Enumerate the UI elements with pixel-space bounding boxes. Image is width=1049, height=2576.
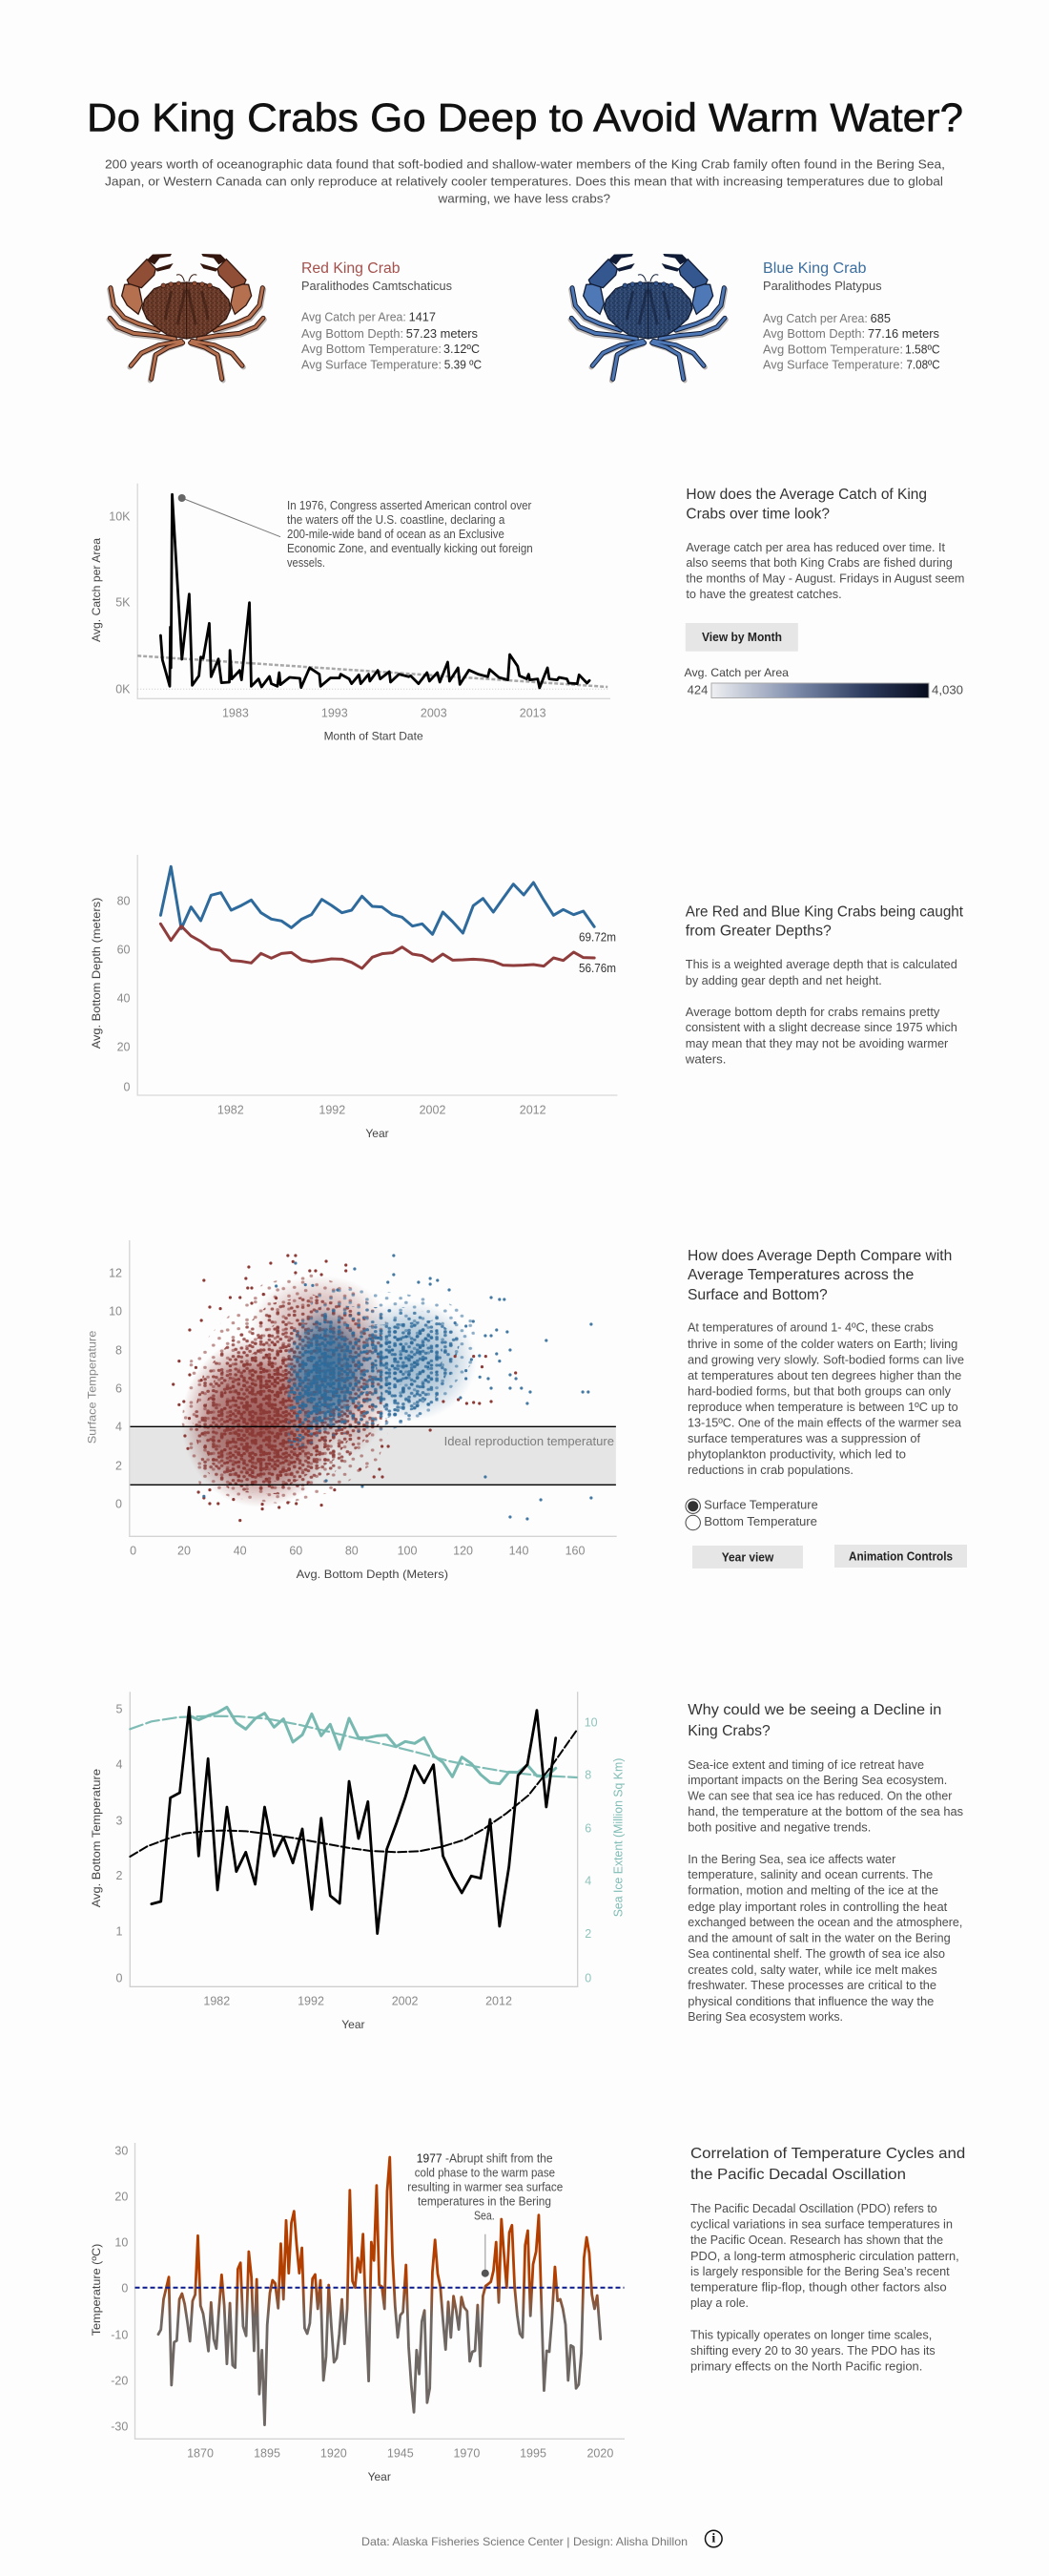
button: view by month: View by Month: [702, 631, 782, 644]
body text: We can see that sea ice has reduced. On the other: [688, 1790, 952, 1803]
body text: to have the greatest catches.: [686, 588, 842, 601]
x axis ticks: [130, 1544, 585, 1557]
footer credit: Data: Alaska Fisheries Science Center | Design: Alisha Dhillon: [361, 2535, 688, 2548]
red crab depth: 57.23 meters: [406, 327, 478, 341]
y axis ticks: -30: [111, 2420, 128, 2434]
heading: [686, 487, 927, 523]
x axis ticks: [203, 1994, 512, 2007]
catch line chart: [137, 494, 607, 689]
y axis ticks: 80: [117, 895, 131, 908]
body text: surface temperatures was a suppression of: [688, 1432, 921, 1445]
body text: This typically operates on longer time scales,: [690, 2329, 932, 2342]
body text: exchanged between the ocean and the atmosphere,: [688, 1916, 962, 1929]
body text: creates cold, salty water, while ice melt makes: [688, 1963, 937, 1977]
body text: at temperatures about ten degrees higher than the: [688, 1369, 961, 1382]
y axis ticks: [117, 895, 131, 1093]
y axis ticks: [109, 1266, 122, 1510]
y axis title: Avg. Bottom Depth (meters): [90, 898, 103, 1049]
x axis ticks: 2002: [420, 1104, 445, 1117]
body text: primary effects on the North Pacific region.: [690, 2360, 922, 2374]
band label: Ideal reproduction temperature: [444, 1435, 614, 1448]
left axis ticks: 3: [116, 1814, 123, 1827]
blue crab surface temperature: Avg Surface Temperature:: [763, 359, 903, 372]
body text: The Pacific Decadal Oscillation (PDO) refers to: [690, 2202, 937, 2215]
heading: [690, 2146, 965, 2183]
y axis ticks: -20: [111, 2375, 128, 2388]
red crab name: Red King Crab: [301, 260, 401, 277]
x axis ticks: 80: [345, 1544, 359, 1557]
heading: [686, 904, 964, 939]
radio: bottom temperature: Bottom Temperature: [704, 1515, 817, 1528]
red crab depth line: [160, 924, 594, 968]
body text: formation, motion and melting of the ice at the: [688, 1884, 938, 1898]
body text: Bering Sea ecosystem works.: [688, 2010, 843, 2024]
y axis ticks: 20: [114, 2190, 128, 2203]
body text: temperature flip-flop, though other factors also: [690, 2281, 947, 2295]
panel: blue king crab stats: [763, 260, 940, 372]
x axis ticks: [222, 707, 546, 720]
x axis ticks: 2003: [421, 707, 447, 720]
y axis title: Surface Temperature: [85, 1330, 98, 1444]
x axis ticks: 1895: [254, 2447, 280, 2461]
x axis ticks: 2012: [520, 1104, 546, 1117]
lines: [130, 1707, 577, 1934]
intro text: [105, 158, 945, 206]
left axis ticks: 2: [116, 1869, 123, 1882]
icon: info: [706, 2530, 722, 2547]
body text: important impacts on the Bering Sea ecosystem.: [688, 1774, 947, 1787]
x axis title: Month of Start Date: [324, 730, 423, 743]
right axis ticks: 4: [585, 1874, 591, 1887]
radio: surface temperature: Surface Temperature: [704, 1499, 818, 1512]
y axis ticks: 40: [117, 992, 131, 1006]
y axis title: Temperature (ºC): [90, 2244, 103, 2336]
end labels: [579, 930, 616, 975]
bottom temperature line: [152, 1707, 556, 1934]
blue outliers: [204, 1256, 591, 1519]
y axis ticks: 30: [114, 2144, 128, 2157]
heading: Surface and Bottom?: [688, 1287, 828, 1303]
blue crab species: Paralithodes Platypus: [763, 280, 882, 293]
scatter points: [174, 1256, 591, 1521]
x axis ticks: 1982: [203, 1994, 230, 2007]
body text: 13-15ºC. One of the main effects of the warmer sea: [688, 1417, 961, 1430]
x axis ticks: 2013: [520, 707, 546, 720]
sea ice line: [189, 1707, 556, 1784]
annotation text: 1977 -Abrupt shift from the: [417, 2151, 553, 2165]
x axis ticks: 2012: [485, 1994, 512, 2007]
intro text: warming, we have less crabs?: [437, 193, 610, 206]
y axis ticks: -10: [111, 2328, 128, 2341]
y axis ticks: 10K: [109, 510, 131, 524]
x axis title: Year: [368, 2470, 391, 2483]
body text: also seems that both King Crabs are fished during: [686, 556, 953, 570]
right axis ticks: 6: [585, 1821, 591, 1835]
heading: Crabs over time look?: [686, 506, 830, 523]
body text: waters.: [685, 1052, 727, 1066]
y axis ticks: 0K: [115, 682, 131, 696]
body text: hand, the temperature at the bottom of the sea has: [688, 1805, 963, 1818]
color legend: 424: [688, 684, 708, 697]
x axis ticks: 1920: [320, 2447, 347, 2461]
PDO line: [158, 2157, 601, 2425]
body text: phytoplankton productivity, which led to: [688, 1448, 906, 1462]
x axis ticks: 2002: [392, 1994, 419, 2007]
end labels: 56.76m: [579, 962, 616, 975]
panel: sea ice commentary: [688, 1702, 963, 2024]
x axis ticks: 1983: [222, 707, 249, 720]
panel: catch commentary: [685, 487, 964, 698]
body text: the months of May - August. Fridays in August seem: [686, 572, 964, 586]
y axis ticks: 0: [115, 1497, 122, 1510]
annotation text: temperatures in the Bering: [418, 2194, 551, 2208]
color legend: Avg. Catch per Area: [685, 666, 789, 679]
y axis ticks: [111, 2144, 128, 2434]
red crab surface temperature: Avg Surface Temperature:: [301, 359, 442, 372]
annotation marker: [482, 2234, 489, 2277]
button: view by month: [686, 623, 798, 652]
x axis ticks: 0: [130, 1544, 136, 1557]
annotation marker: [178, 494, 186, 502]
button: animation controls: [834, 1545, 967, 1568]
right axis ticks: [585, 1715, 598, 1984]
body text: by adding gear depth and net height.: [686, 974, 882, 987]
body text: Sea-ice extent and timing of ice retreat have: [688, 1758, 924, 1772]
left axis ticks: 1: [116, 1924, 123, 1938]
panel: PDO chart: [90, 2143, 625, 2483]
x axis ticks: 60: [289, 1544, 302, 1557]
left axis ticks: [116, 1703, 123, 1984]
panel: PDO commentary: [690, 2146, 965, 2374]
blue crab catch: 685: [871, 312, 891, 325]
x axis ticks: 1993: [321, 707, 348, 720]
right axis ticks: 10: [585, 1715, 598, 1729]
annotation text: In 1976, Congress asserted American control over: [287, 499, 531, 512]
heading: How does Average Depth Compare with: [688, 1248, 952, 1264]
right axis ticks: 8: [585, 1769, 591, 1782]
x axis ticks: 1992: [298, 1994, 324, 2007]
y axis ticks: [109, 510, 131, 696]
red crab depth: Avg Bottom Depth:: [301, 327, 403, 341]
body text: play a role.: [690, 2296, 749, 2310]
body text: cyclical variations in sea surface temperatures in: [690, 2218, 953, 2232]
annotation text: [407, 2151, 563, 2222]
end labels: 69.72m: [579, 930, 616, 944]
color legend: [685, 666, 963, 698]
annotation text: Sea.: [474, 2209, 495, 2222]
depth lines: [160, 866, 594, 968]
body text: is largely responsible for the Bering Sea’s recent: [690, 2265, 950, 2278]
body text: and growing very slowly. Soft-bodied forms can live: [688, 1354, 964, 1367]
body text: the Pacific Ocean. Research has shown that the: [690, 2233, 943, 2247]
body text: [688, 1758, 963, 2024]
y axis ticks: 12: [109, 1266, 122, 1279]
body text: both positive and negative trends.: [688, 1821, 871, 1835]
y axis ticks: 2: [115, 1460, 122, 1473]
x axis ticks: [187, 2447, 613, 2461]
left axis ticks: 5: [116, 1703, 123, 1716]
heading: Correlation of Temperature Cycles and: [690, 2146, 965, 2162]
right axis ticks: 0: [585, 1971, 591, 1984]
body text: This is a weighted average depth that is calculated: [686, 958, 957, 971]
x axis ticks: 1970: [453, 2447, 480, 2461]
red crab species: Paralithodes Camtschaticus: [301, 280, 452, 293]
intro text: Japan, or Western Canada can only reproduce at relatively cooler temperatures. Does this mean that with increasing temperatures due to global: [105, 176, 943, 189]
panel: depth line chart: [90, 855, 617, 1140]
x axis ticks: 1982: [217, 1104, 244, 1117]
red crab depth: [301, 327, 478, 341]
y axis ticks: 10: [114, 2235, 128, 2249]
button: animation controls: Animation Controls: [849, 1550, 953, 1564]
panel: temperature and sea ice chart: [90, 1692, 625, 2031]
heading: Average Temperatures across the: [688, 1267, 914, 1283]
icon: red king crab: [109, 254, 264, 381]
x axis ticks: 1945: [387, 2447, 414, 2461]
x axis ticks: [217, 1104, 546, 1117]
red crab bottom temperature: Avg Bottom Temperature:: [301, 343, 442, 356]
body text: edge play important roles in controlling the heat: [688, 1901, 948, 1914]
y axis ticks: 0: [121, 2281, 128, 2295]
x axis ticks: 40: [234, 1544, 247, 1557]
x axis title: Year: [365, 1127, 389, 1140]
body text: physical conditions that influence the way the: [688, 1995, 934, 2008]
heading: How does the Average Catch of King: [686, 487, 927, 503]
blue crab depth: Avg Bottom Depth:: [763, 327, 865, 341]
y axis ticks: 0: [124, 1080, 131, 1093]
body text: Average bottom depth for crabs remains pretty: [686, 1006, 940, 1019]
x axis ticks: 1992: [319, 1104, 345, 1117]
y axis ticks: 20: [117, 1041, 131, 1054]
red outliers: [174, 1256, 516, 1521]
x axis ticks: 1870: [187, 2447, 214, 2461]
red points dense core: [225, 1358, 313, 1476]
body text: freshwater. These processes are critical to the: [688, 1979, 936, 1992]
x axis ticks: 140: [509, 1544, 528, 1557]
body text: reductions in crab populations.: [688, 1464, 854, 1477]
icon: info: i: [711, 2532, 715, 2545]
body text: temperature, salinity and ocean currents. The: [688, 1868, 933, 1881]
body text: Average catch per area has reduced over time. It: [686, 541, 946, 554]
x axis ticks: 100: [398, 1544, 417, 1557]
body text: In the Bering Sea, sea ice affects water: [688, 1853, 895, 1866]
blue crab bottom temperature: 1.58ºC: [905, 343, 940, 357]
body text: [685, 958, 957, 1066]
red crab bottom temperature: 3.12ºC: [443, 343, 480, 356]
right axis title: Sea Ice Extent (Million Sq Km): [611, 1758, 625, 1917]
body text: PDO, a long-term atmospheric circulation pattern,: [690, 2250, 959, 2263]
blue crab depth: [763, 327, 939, 341]
blue crab bottom temperature: Avg Bottom Temperature:: [763, 343, 903, 357]
ideal reproduction band: [130, 1426, 616, 1485]
x axis ticks: 1995: [520, 2447, 546, 2461]
x axis ticks: 160: [566, 1544, 585, 1557]
left axis ticks: 0: [116, 1971, 123, 1984]
body text: and the amount of salt in the water on the Bering: [688, 1932, 951, 1945]
x axis ticks: 20: [177, 1544, 191, 1557]
left axis title: Avg. Bottom Temperature: [90, 1769, 103, 1907]
y axis ticks: 5K: [115, 596, 131, 610]
panel: scatter plot: [85, 1240, 617, 1581]
body text: [688, 1321, 964, 1477]
red crab surface temperature: 5.39 ºC: [444, 359, 482, 372]
annotation text: the waters off the U.S. coastline, declaring a: [287, 513, 504, 527]
heading: the Pacific Decadal Oscillation: [690, 2167, 906, 2183]
title: Do King Crabs Go Deep to Avoid Warm Water?: [87, 95, 963, 139]
body text: hard-bodied forms, but that both groups can only: [688, 1385, 952, 1399]
bottom temperature trend: [130, 1730, 577, 1857]
button: year view: Year view: [722, 1551, 774, 1565]
panel: catch over time chart: [90, 484, 610, 743]
blue points: [283, 1288, 477, 1450]
x axis title: Avg. Bottom Depth (Meters): [297, 1568, 448, 1581]
heading: Why could we be seeing a Decline in: [688, 1702, 941, 1718]
heading: [688, 1702, 941, 1739]
band boundary lines: [130, 1426, 616, 1485]
y axis ticks: 6: [115, 1382, 122, 1396]
sea ice trend: [130, 1716, 577, 1777]
heading: Are Red and Blue King Crabs being caught: [686, 904, 964, 920]
red crab catch: 1417: [409, 311, 436, 324]
annotation text: 200-mile-wide band of ocean as an Exclusive: [287, 528, 504, 541]
x axis title: Year: [341, 2018, 365, 2031]
body text: [690, 2202, 959, 2374]
x axis ticks: 120: [453, 1544, 473, 1557]
blue crab depth: 77.16 meters: [868, 327, 939, 341]
right axis ticks: 2: [585, 1927, 591, 1941]
annotation text: Economic Zone, and eventually kicking out foreign: [287, 542, 533, 555]
left axis ticks: 4: [116, 1757, 123, 1771]
heading: King Crabs?: [688, 1723, 771, 1739]
annotation text: resulting in warmer sea surface: [407, 2180, 563, 2193]
red points outer layers: [181, 1272, 389, 1507]
panel: depth commentary: [685, 904, 964, 1066]
blue crab surface temperature: 7.08ºC: [906, 359, 940, 372]
icon: blue king crab: [570, 254, 726, 381]
body text: consistent with a slight decrease since 1975 which: [686, 1021, 957, 1034]
body text: reproduce when temperature is between 1ºC up to: [688, 1401, 958, 1414]
body text: shifting every 20 to 30 years. The PDO has its: [690, 2344, 936, 2358]
blue crab catch: Avg Catch per Area:: [763, 312, 868, 325]
blue crab depth line: [160, 866, 594, 934]
button: year view: [692, 1546, 803, 1568]
y axis title: Avg. Catch per Area: [90, 538, 103, 642]
body text: may mean that they may not be avoiding warmer: [686, 1037, 948, 1050]
heading: from Greater Depths?: [686, 924, 832, 939]
heading: [688, 1248, 952, 1303]
y axis ticks: 8: [115, 1343, 122, 1357]
blue crab name: Blue King Crab: [763, 260, 866, 277]
annotation text: cold phase to the warm pase: [415, 2166, 555, 2179]
annotation text: [287, 499, 533, 570]
panel: scatter commentary: [686, 1248, 967, 1568]
y axis ticks: 10: [109, 1305, 122, 1319]
annotation text: vessels.: [287, 556, 325, 570]
intro text: 200 years worth of oceanographic data found that soft-bodied and shallow-water members of the King Crab family often found in the Bering Sea,: [105, 158, 945, 172]
body text: At temperatures of around 1- 4ºC, these crabs: [688, 1321, 934, 1335]
zero reference line: [135, 2287, 624, 2289]
x axis ticks: 2020: [586, 2447, 613, 2461]
panel: red king crab stats: [301, 260, 482, 372]
body text: Sea continental shelf. The growth of sea ice also: [688, 1947, 945, 1961]
body text: thrive in some of the colder waters on Earth; living: [688, 1338, 957, 1351]
red crab catch: Avg Catch per Area:: [301, 311, 406, 324]
y axis ticks: 60: [117, 944, 131, 957]
color legend: 4,030: [932, 684, 963, 697]
y axis ticks: 4: [115, 1421, 122, 1434]
body text: [686, 541, 964, 601]
